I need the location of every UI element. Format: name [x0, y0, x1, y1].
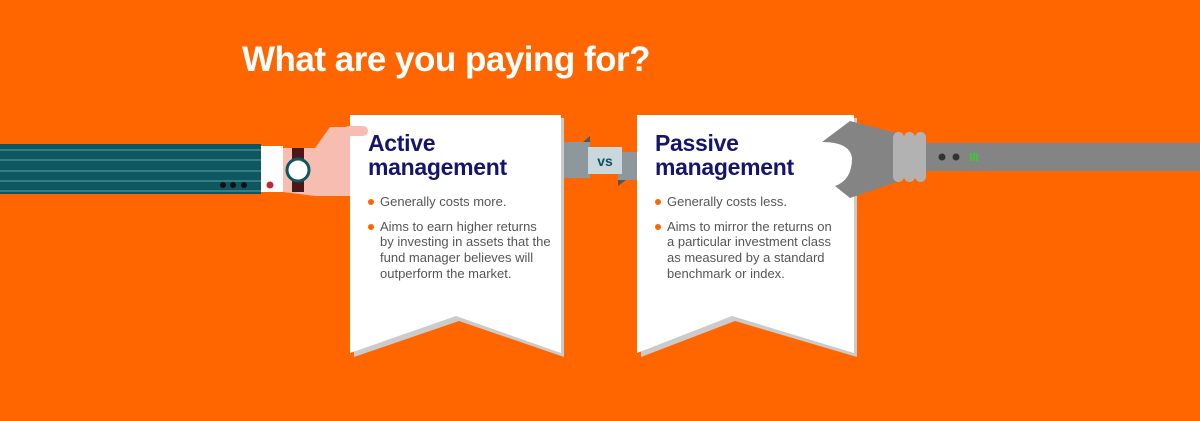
bullets: active: Aims to earn higher returns by investing in assets that the fund manager believes will outperform the market. [380, 219, 551, 281]
heading: passive: Passive [655, 130, 739, 156]
arm: left hand with sleeve [0, 126, 368, 196]
heading: passive: management [655, 154, 794, 180]
bullets: active: Generally costs more. [380, 194, 506, 209]
vs connector: vs [597, 153, 613, 169]
wrench [822, 121, 1200, 198]
heading: passive [655, 130, 794, 180]
heading: active [368, 130, 507, 180]
bullets: passive: Aims to mirror the returns on a particular investment class as measured by a standard benchmark or index. [667, 219, 832, 281]
passive card text [655, 130, 832, 281]
vs connector [561, 136, 637, 186]
title: What are you paying for? [242, 40, 650, 79]
card: passive (shape) [637, 115, 857, 357]
heading: active: management [368, 154, 507, 180]
bullets: passive [655, 194, 832, 281]
heading: active: Active [368, 130, 435, 156]
bullets: passive: Generally costs less. [667, 194, 787, 209]
card: active (shape) [350, 115, 564, 357]
bullets: active [368, 194, 551, 281]
active card text [368, 130, 551, 281]
